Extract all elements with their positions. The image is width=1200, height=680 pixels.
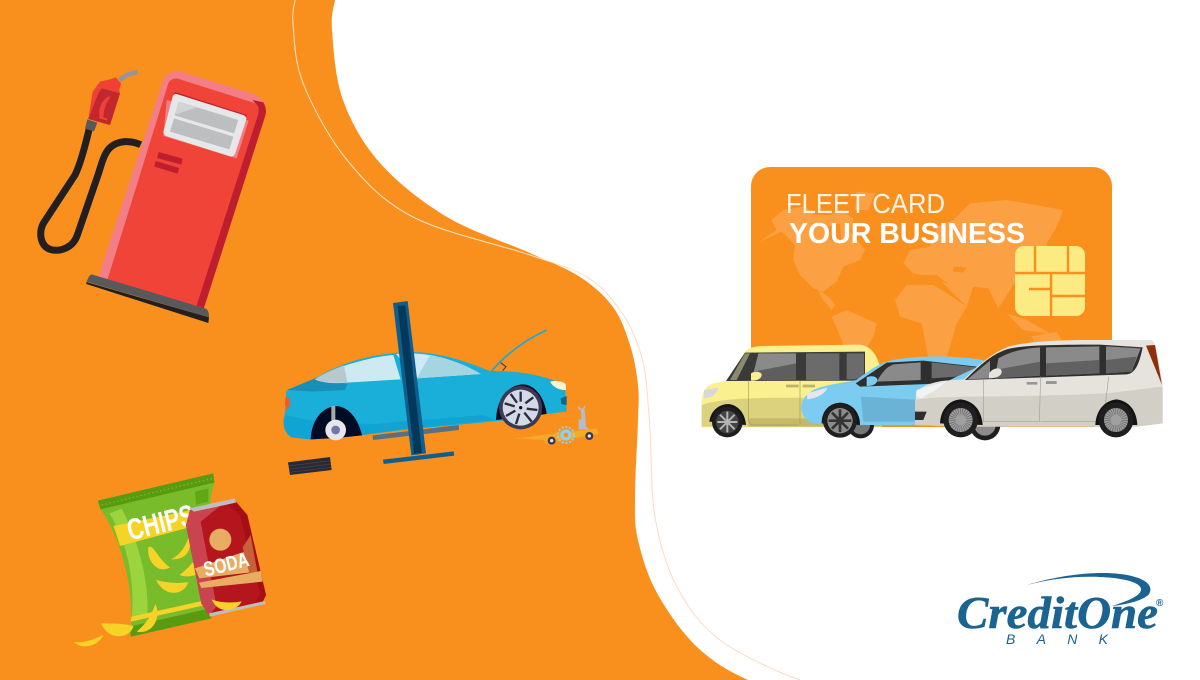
chip <box>1015 246 1085 316</box>
hose <box>41 128 141 250</box>
Credit One Bank logo <box>957 573 1164 647</box>
mechanic's tools <box>515 406 598 445</box>
chip pieces <box>148 535 199 593</box>
logo registered mark: ® <box>1156 598 1164 609</box>
soda label: SODA <box>201 548 252 582</box>
car body <box>284 352 567 439</box>
icon: car on lift <box>284 301 598 475</box>
orange background wave <box>0 0 748 680</box>
logo bank: BANK <box>1006 631 1109 647</box>
yellow car <box>702 345 882 438</box>
pump slots <box>154 152 183 174</box>
nozzle <box>85 77 121 131</box>
pump base <box>87 274 209 317</box>
card text: your business: YOUR BUSINESS <box>789 218 1025 250</box>
thin curve outline: peach lower <box>587 277 800 680</box>
logo wordmark: CreditOne <box>957 588 1158 638</box>
logo swoosh <box>1027 573 1150 606</box>
pump screen <box>163 92 249 158</box>
icon: fuel pump <box>41 71 266 323</box>
nozzle neck <box>119 72 138 81</box>
blue car <box>801 357 983 438</box>
lift column <box>383 301 454 464</box>
soda can <box>186 498 266 617</box>
pump body <box>98 71 265 308</box>
world map <box>759 192 1068 367</box>
rear wheel arch with disc <box>311 406 362 440</box>
chips label: CHIPS <box>124 499 198 547</box>
front wheel <box>496 384 547 429</box>
white van <box>915 340 1163 440</box>
platform under car <box>373 425 459 440</box>
fleet of cars <box>702 340 1163 440</box>
raised hood <box>492 330 547 371</box>
fleet credit card <box>751 167 1112 427</box>
removed tyre <box>288 457 332 475</box>
headlight <box>550 381 566 390</box>
chips bag <box>98 473 220 636</box>
icon: chips and soda <box>74 473 266 646</box>
car windows <box>315 353 481 383</box>
card text: fleet card: FLEET CARD <box>786 188 945 219</box>
thin curve outline: white upper <box>293 0 587 277</box>
spilled chips <box>74 599 242 646</box>
